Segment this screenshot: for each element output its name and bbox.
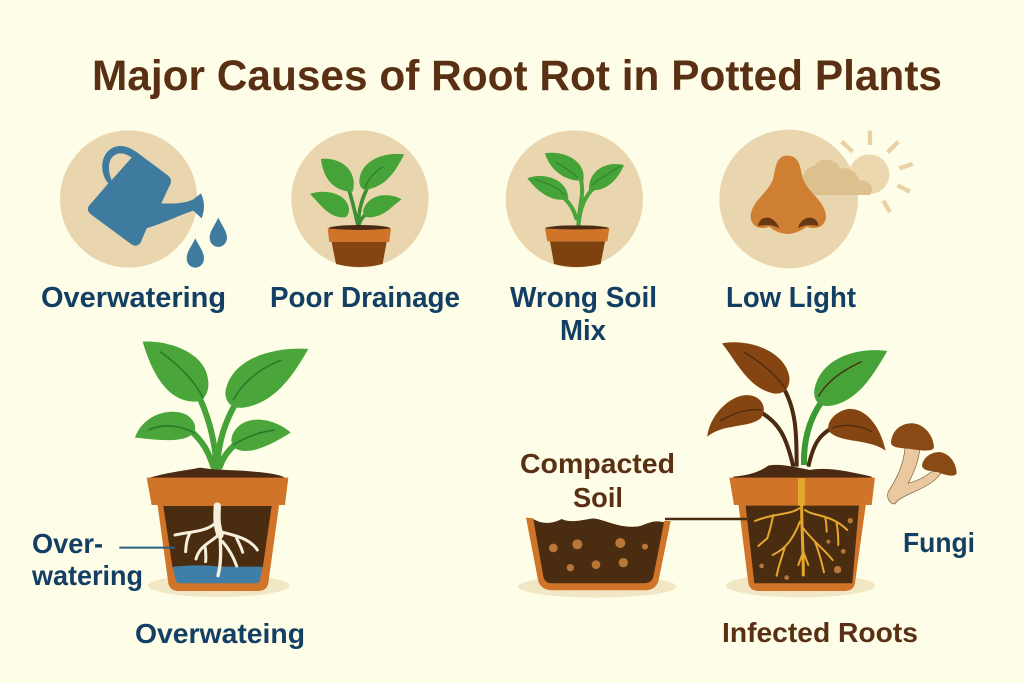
icon: fungi [888, 423, 957, 504]
label: Compacted Soil [520, 448, 675, 513]
label: Infected Roots: Infected Roots [722, 617, 918, 648]
label: Fungi: Fungi [903, 527, 975, 558]
illustration: infected plant [707, 342, 887, 597]
label: Over-watering: Over- [32, 528, 103, 559]
icon: watering can [60, 130, 227, 268]
label: Overwatering: Overwatering [41, 282, 226, 314]
illustration: compacted soil pot [518, 518, 677, 598]
label: Poor Drainage: Poor Drainage [270, 282, 460, 314]
icon: nose, cloud and sun [719, 130, 913, 268]
label: Over-watering: watering [31, 560, 143, 591]
icon: plant in circle [291, 130, 429, 268]
label: Overwateing: Overwateing [135, 618, 305, 649]
label: Compacted Soil: Compacted [520, 448, 675, 479]
icon: seedling in circle [506, 130, 643, 268]
illustration: overwatered plant [119, 342, 308, 597]
title: Major Causes of Root Rot in Potted Plants [92, 52, 942, 100]
label: Wrong Soil Mix: Wrong Soil [510, 282, 657, 314]
label: Wrong Soil Mix: Mix [560, 315, 606, 347]
label: Over-watering [31, 528, 143, 591]
label: Wrong Soil Mix [510, 282, 657, 347]
leader line: compacted soil to pot [665, 518, 747, 520]
label: Compacted Soil: Soil [573, 482, 623, 513]
label: Low Light: Low Light [726, 282, 856, 314]
